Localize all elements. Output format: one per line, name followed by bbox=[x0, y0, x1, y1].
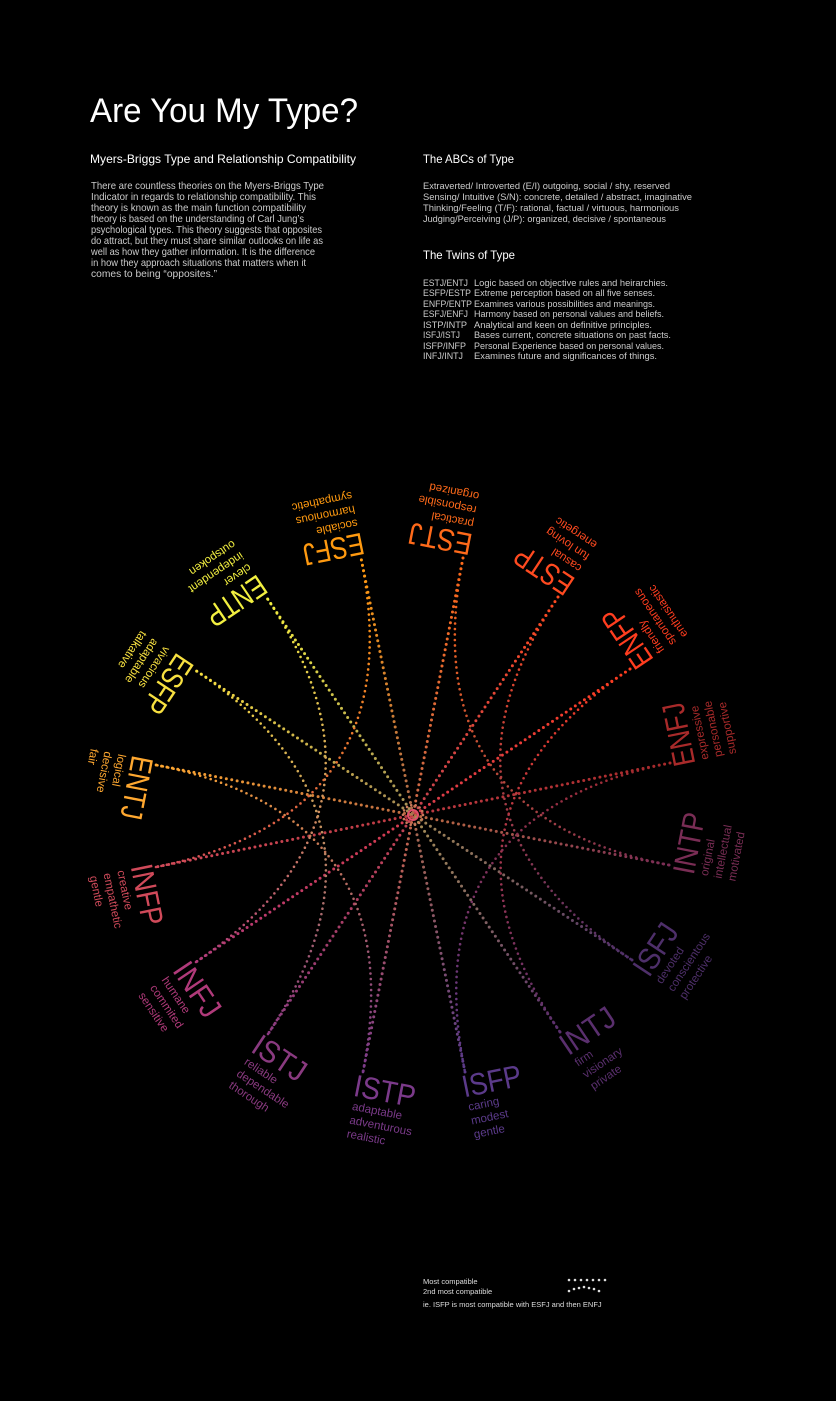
twins list: ENFP/ENTP bbox=[423, 299, 472, 310]
legend text bbox=[423, 1277, 602, 1309]
legend dots bbox=[568, 1279, 606, 1292]
label: INTJ bbox=[553, 1000, 643, 1094]
twins list: ISFP/INFP bbox=[423, 341, 466, 352]
label: ISTJ: dependable bbox=[234, 1068, 291, 1111]
label: INTJ: private bbox=[589, 1063, 624, 1092]
label: INFJ: INFJ bbox=[166, 955, 228, 1024]
twins list: ISFJ/ISTJ bbox=[423, 330, 460, 341]
label: ISTP: adaptable bbox=[351, 1101, 403, 1122]
ABCs list: Judging/Perceiving (J/P): organized, decisive / spontaneous bbox=[423, 214, 666, 225]
label: ISTJ: reliable bbox=[242, 1056, 279, 1087]
ABCs list: Extraverted/ Introverted (E/I) outgoing, social / shy, reserved bbox=[423, 181, 670, 192]
label: ENTP: independent bbox=[185, 549, 245, 595]
ABCs list: Sensing/ Intuitive (S/N): concrete, detailed / abstract, imaginative bbox=[423, 192, 692, 203]
twins list: Logic based on objective rules and heirarchies. bbox=[474, 278, 668, 289]
twins list: Analytical and keen on definitive principles. bbox=[474, 320, 652, 331]
label: ENFJ: expressive bbox=[689, 704, 712, 761]
ABCs list: Thinking/Feeling (T/F): rational, factual / virtuous, harmonious bbox=[423, 203, 679, 214]
title: Are You My Type? bbox=[90, 92, 358, 130]
intro text block: do attract, but they must share similar outlooks on life as bbox=[91, 235, 323, 247]
label: ENTP: outspoken bbox=[187, 538, 237, 577]
label: ENFP: friendly bbox=[636, 617, 667, 655]
label: ISFP bbox=[459, 1058, 532, 1142]
label: ISFJ bbox=[626, 905, 725, 1003]
label: ISTP bbox=[344, 1068, 422, 1152]
center ring bbox=[403, 805, 423, 825]
label: INTP: motivated bbox=[726, 831, 748, 882]
label: ESFJ: sympathetic bbox=[290, 489, 353, 513]
label: ENFP: enthusiastic bbox=[646, 582, 690, 639]
label: INFP: creative bbox=[114, 869, 134, 911]
intro text block: psychological types. This theory suggests that opposites bbox=[91, 224, 322, 236]
label: ISFP: modest bbox=[470, 1108, 510, 1127]
twins list: ESFJ/ENFJ bbox=[423, 309, 468, 320]
label: ESTJ: responsible bbox=[418, 492, 478, 515]
legend bbox=[423, 1277, 606, 1309]
label: ESFJ: ESFJ bbox=[300, 526, 367, 572]
label: ESTP: energetic bbox=[553, 514, 600, 550]
label: ENFP bbox=[593, 578, 692, 675]
label: ENFJ: personable bbox=[702, 700, 725, 758]
twins list: Harmony based on personal values and beliefs. bbox=[474, 309, 664, 320]
heading: Twins of Type: The Twins of Type bbox=[423, 248, 515, 262]
intro text block: There are countless theories on the Myers-Briggs Type bbox=[91, 180, 324, 192]
label: ISFJ: devoted bbox=[654, 945, 687, 986]
straight lines: most compatible bbox=[156, 558, 670, 1072]
legend text: Most compatible bbox=[423, 1277, 478, 1286]
label: INFP bbox=[86, 861, 170, 936]
label: INTP: original bbox=[699, 838, 718, 877]
ABCs list bbox=[423, 181, 692, 225]
label: ENFP: ENFP bbox=[594, 601, 660, 675]
heading: ABCs of Type: The ABCs of Type bbox=[423, 152, 514, 166]
label: INTJ: firm bbox=[573, 1049, 596, 1069]
intro text block: theory is known as the main function compatibility bbox=[91, 202, 307, 214]
label: INFJ: humane bbox=[159, 975, 192, 1016]
label: ISFP: gentle bbox=[473, 1123, 506, 1141]
curved lines: 2nd most compatible bbox=[156, 558, 670, 1072]
label: INTP: INTP bbox=[666, 809, 712, 877]
twins list: Extreme perception based on all five senses. bbox=[474, 288, 655, 299]
twins list: INFJ/INTJ bbox=[423, 351, 463, 362]
type labels bbox=[76, 478, 750, 1152]
label: INTP: intellectual bbox=[713, 824, 735, 880]
label: ESTJ: practical bbox=[431, 509, 475, 529]
label: INFP: empathetic bbox=[101, 872, 124, 930]
label: ESFJ: harmonious bbox=[294, 503, 356, 526]
label: ESFP: adaptable bbox=[122, 636, 160, 685]
label: ESFJ: sociable bbox=[315, 516, 359, 536]
label: ISTP: adventurous bbox=[348, 1115, 413, 1139]
label: ISTP: ISTP bbox=[351, 1068, 419, 1114]
label: ENTJ: ENTJ bbox=[113, 753, 160, 823]
twins list: Bases current, concrete situations on past facts. bbox=[474, 330, 671, 341]
label: ESFP: ESFP bbox=[136, 648, 200, 720]
subtitle: Myers-Briggs Type and Relationship Compatibility bbox=[90, 152, 356, 166]
label: ISTJ: ISTJ bbox=[246, 1028, 313, 1089]
label: ESFP: vivacious bbox=[135, 644, 172, 690]
label: ISTP: realistic bbox=[346, 1128, 387, 1148]
label: INFJ bbox=[134, 955, 228, 1045]
intro text block: Indicator in regards to relationship compatibility. This bbox=[91, 191, 316, 203]
intro text block: well as how they gather information. It is the difference bbox=[90, 246, 315, 258]
chart: compatibility wheel bbox=[76, 478, 750, 1152]
label: ISTJ bbox=[225, 1028, 317, 1123]
intro text block: comes to being “opposites.” bbox=[91, 268, 217, 280]
label: ESFP: talkative bbox=[115, 628, 148, 670]
label: ENFP: spontaneous bbox=[632, 586, 679, 647]
legend text: 2nd most compatible bbox=[423, 1287, 492, 1296]
label: ENFJ bbox=[655, 692, 740, 769]
label: INFJ: sensitive bbox=[136, 991, 170, 1034]
twins list bbox=[423, 278, 671, 362]
label: INFP: INFP bbox=[124, 861, 170, 928]
label: ISFJ: conscientous bbox=[666, 931, 713, 994]
twins list: ISTP/INTP bbox=[423, 320, 467, 331]
label: ENTP: clever bbox=[221, 561, 253, 588]
label: INTJ: INTJ bbox=[553, 1000, 622, 1062]
label: ESTJ: organized bbox=[428, 480, 480, 502]
label: INFP: gentle bbox=[87, 875, 105, 908]
label: ENFJ: supportive bbox=[717, 701, 739, 755]
twins list: ESFP/ESTP bbox=[423, 288, 471, 299]
label: INFJ: commited bbox=[147, 983, 185, 1031]
label: INTP bbox=[666, 809, 750, 884]
legend text: ie. ISFP is most compatible with ESFJ and then ENFJ bbox=[423, 1300, 602, 1309]
intro text block bbox=[90, 180, 324, 280]
label: ENTJ: decisive bbox=[94, 750, 113, 793]
label: ISFP: caring bbox=[467, 1096, 500, 1114]
label: ESFJ bbox=[290, 488, 367, 573]
label: ISTJ: thorough bbox=[226, 1080, 271, 1115]
twins list: Examines various possibilities and meanings. bbox=[474, 299, 655, 310]
label: ESTP: fun loving bbox=[544, 525, 592, 562]
label: ENTJ bbox=[76, 746, 160, 823]
label: ESFP bbox=[104, 627, 200, 720]
label: ESTJ: ESTJ bbox=[405, 515, 475, 562]
label: ESTP: casual bbox=[550, 545, 584, 574]
label: INTJ: visionary bbox=[581, 1045, 625, 1081]
intro text block: theory is based on the understanding of Carl Jung’s bbox=[91, 213, 304, 225]
intro text block: in how they approach situations that matters when it bbox=[91, 257, 306, 269]
label: ESTP bbox=[508, 506, 601, 602]
label: ENTJ: fair bbox=[85, 748, 100, 766]
label: ISFJ: protective bbox=[678, 953, 715, 1002]
label: ENTP: ENTP bbox=[199, 568, 273, 634]
label: ENTP bbox=[178, 536, 273, 634]
twins list: Examines future and significances of things. bbox=[474, 351, 657, 362]
label: ISFP: ISFP bbox=[459, 1058, 525, 1104]
twins list: Personal Experience based on personal values. bbox=[474, 341, 664, 352]
label: ISFJ: ISFJ bbox=[626, 916, 686, 982]
twins list: ESTJ/ENTJ bbox=[423, 278, 468, 289]
label: ENFJ: ENFJ bbox=[655, 700, 702, 769]
label: ESTJ bbox=[405, 478, 482, 562]
label: ENTJ: logical bbox=[109, 753, 127, 787]
label: ESTP: ESTP bbox=[508, 538, 580, 602]
